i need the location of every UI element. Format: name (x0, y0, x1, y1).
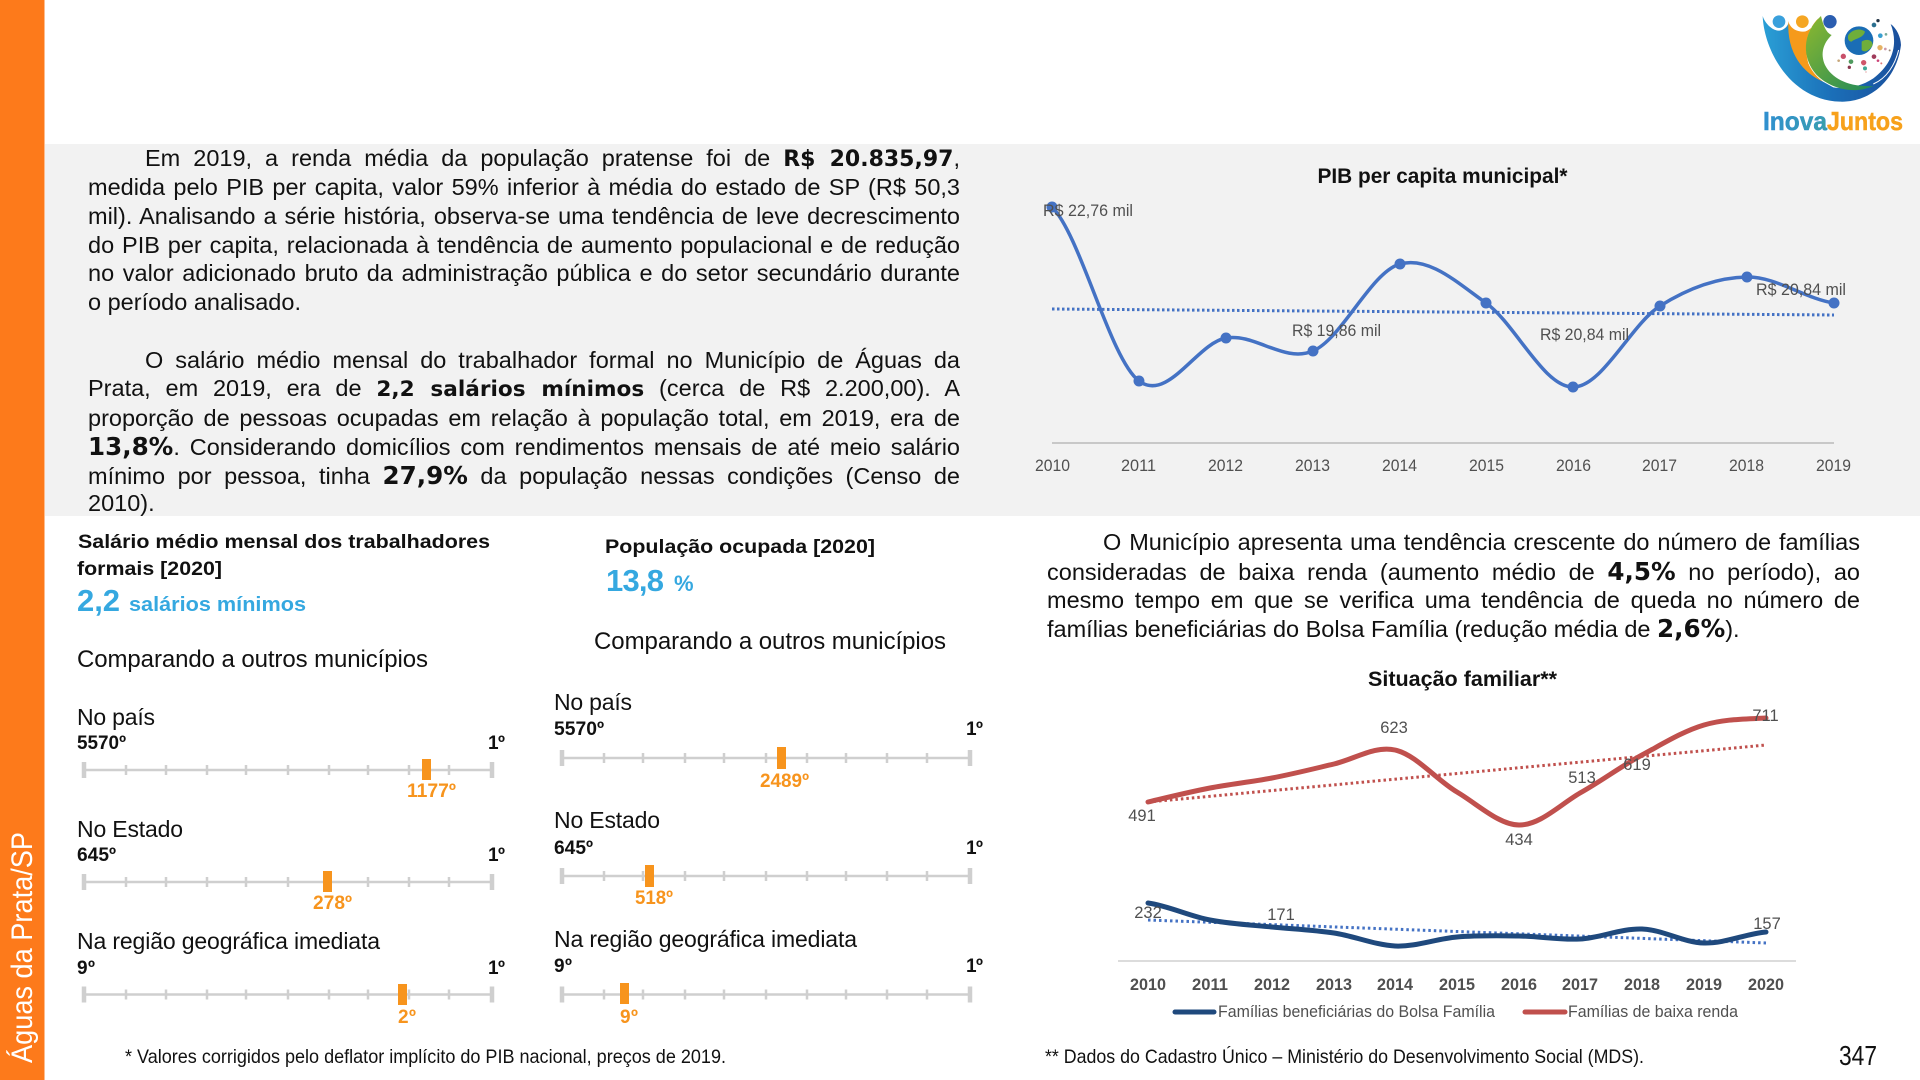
text block: famílias (1047, 529, 1860, 643)
text: mil). Analisando a série história, observa-se uma tendência de leve decrescimento (88, 203, 960, 229)
chart title: Situação familiar** (1368, 668, 1558, 691)
x axis years: 2019 (1686, 976, 1722, 994)
rank: região imediata: Na região geográfica imediata (77, 928, 380, 954)
page number: 347 (1839, 1040, 1877, 1071)
rank: região imediata: 1º (966, 956, 983, 977)
data labels: 232 (1134, 904, 1162, 922)
rank: no estado: No Estado (77, 816, 183, 842)
data labels: 513 (1568, 769, 1596, 787)
text: mesmo tempo em que se verifica uma tendência de queda no número de (1047, 587, 1860, 613)
heading: População ocupada [2020] (605, 536, 875, 558)
x axis years: 2010 (1035, 457, 1070, 475)
rank: no país (77, 704, 505, 802)
text: famílias beneficiárias do Bolsa Família (redução média de 2,6%). (1047, 614, 1740, 643)
rank: no país: No país (554, 689, 632, 715)
x axis years (1130, 976, 1784, 994)
big value (606, 563, 694, 598)
x axis years: 2018 (1729, 457, 1764, 475)
chart: situação familiar (1118, 668, 1796, 1021)
x axis years: 2018 (1624, 976, 1660, 994)
text: proporção de pessoas ocupadas em relação à população total, em 2019, era de (88, 405, 960, 431)
logo: Inova Juntos (1763, 15, 1903, 136)
rank: no estado: 278º (313, 893, 352, 914)
rank: no país: 1º (966, 719, 983, 740)
data labels: 623 (1380, 719, 1408, 737)
big value: 2,2 (77, 583, 120, 618)
x axis years: 2016 (1556, 457, 1591, 475)
data labels: 434 (1505, 831, 1533, 849)
rank: no estado: 518º (635, 888, 673, 909)
heading (77, 531, 490, 580)
data labels: R$ 19,86 mil (1292, 322, 1381, 340)
x axis years: 2013 (1316, 976, 1352, 994)
comparison heading: Comparando a outros municípios (77, 646, 428, 673)
x axis years: 2014 (1377, 976, 1414, 994)
rank: região imediata: 9º (77, 958, 95, 979)
data labels: R$ 22,76 mil (1043, 202, 1133, 220)
panel: salário médio mensal (77, 531, 505, 1028)
legend: Famílias beneficiárias do Bolsa Família (1218, 1003, 1496, 1021)
panel: gray background (45, 144, 1920, 516)
sidebar: municipality (0, 0, 44, 1080)
x axis years: 2019 (1816, 457, 1851, 475)
line: bolsa família (1148, 903, 1766, 946)
x axis years: 2011 (1121, 457, 1156, 475)
rank: no estado: 1º (488, 845, 505, 866)
data labels (1043, 202, 1846, 344)
text: do PIB per capita, relacionada à tendência de aumento populacional e de redução (88, 232, 960, 258)
data labels: 491 (1128, 807, 1156, 825)
comparison heading: Comparando a outros municípios (594, 628, 946, 655)
rank: região imediata: Na região geográfica imediata (554, 926, 857, 952)
rank: no estado: 645º (77, 845, 116, 866)
rank: no país: No país (77, 704, 155, 730)
rank: no país: 2489º (760, 771, 809, 792)
x axis years: 2013 (1295, 457, 1330, 475)
heading: Salário médio mensal dos trabalhadores (78, 531, 490, 553)
data labels (1128, 707, 1781, 933)
rank: região imediata (77, 928, 505, 1028)
chart title: PIB per capita municipal* (1318, 165, 1568, 188)
x axis years: 2011 (1192, 976, 1228, 994)
rank: no país: 1º (488, 733, 505, 754)
rank: região imediata (554, 926, 983, 1028)
big value: 13,8 (606, 563, 664, 598)
rank: no estado (554, 807, 983, 909)
footnote: PIB: * Valores corrigidos pelo deflator implícito do PIB nacional, preços de 2019. (125, 1046, 726, 1068)
data labels: R$ 20,84 mil (1540, 326, 1629, 344)
data labels: 171 (1267, 906, 1295, 924)
logo: Inova Juntos: Inova (1763, 106, 1827, 136)
rank: região imediata: 2º (398, 1007, 416, 1028)
text: 13,8%. Considerando domicílios com rendimentos mensais de até meio salário (88, 432, 960, 461)
heading: formais [2020] (77, 558, 222, 580)
rank: região imediata: 9º (554, 956, 572, 977)
x axis years: 2017 (1642, 457, 1677, 475)
text: medida pelo PIB per capita, valor 59% inferior à média do estado de SP (R$ 50,3 (88, 174, 960, 200)
line series (1052, 207, 1834, 387)
text block: salário médio (88, 347, 960, 516)
x axis years: 2010 (1130, 976, 1166, 994)
data labels: 157 (1753, 915, 1781, 933)
rank: no estado: 645º (554, 838, 593, 859)
x axis years: 2017 (1562, 976, 1598, 994)
text: O Município apresenta uma tendência crescente do número de famílias (1103, 529, 1860, 555)
text: no valor adicionado bruto da administração pública e do setor secundário durante (88, 260, 960, 286)
text: Prata, em 2019, era de 2,2 salários mínimos (cerca de R$ 2.200,00). A (88, 375, 960, 402)
data labels: 711 (1752, 707, 1779, 725)
x axis years: 2014 (1382, 457, 1417, 475)
x axis years: 2012 (1208, 457, 1243, 475)
rank: região imediata: 9º (620, 1007, 638, 1028)
big value: salários mínimos (129, 594, 306, 616)
rank: no país: 5570º (77, 733, 126, 754)
x axis years: 2015 (1439, 976, 1475, 994)
legend: Famílias de baixa renda (1568, 1003, 1739, 1021)
legend (1175, 1003, 1739, 1021)
rank: região imediata: 1º (488, 958, 505, 979)
sidebar label: Águas da Prata/SP (6, 832, 39, 1063)
x axis years: 2012 (1254, 976, 1290, 994)
rank: no país (554, 689, 983, 792)
rank: no estado: No Estado (554, 807, 660, 833)
chart: PIB per capita municipal (1035, 165, 1851, 475)
footnote: Cadastro Único: ** Dados do Cadastro Único – Ministério do Desenvolvimento Social (MDS). (1045, 1045, 1644, 1068)
text: o período analisado. (88, 289, 301, 315)
text block: renda média (88, 145, 960, 315)
rank: no estado (77, 816, 505, 914)
x axis years: 2020 (1748, 976, 1784, 994)
data labels: 619 (1623, 756, 1651, 774)
text: 2010). (88, 490, 155, 516)
text: O salário médio mensal do trabalhador formal no Município de Águas da (145, 347, 960, 373)
big value: % (674, 571, 694, 596)
big value (77, 583, 306, 618)
x axis years: 2015 (1469, 457, 1504, 475)
logo: Inova Juntos: Juntos (1827, 106, 1903, 136)
x axis years: 2016 (1501, 976, 1537, 994)
text: consideradas de baixa renda (aumento médio de 4,5% no período), ao (1047, 557, 1860, 586)
rank: no país: 1177º (407, 781, 456, 802)
x axis years (1035, 457, 1851, 475)
panel: população ocupada (554, 536, 983, 1028)
data labels: R$ 20,84 mil (1756, 281, 1846, 299)
rank: no estado: 1º (966, 838, 983, 859)
text: mínimo por pessoa, tinha 27,9% da população nessas condições (Censo de (88, 461, 960, 490)
text: Em 2019, a renda média da população pratense foi de R$ 20.835,97, (145, 145, 960, 172)
rank: no país: 5570º (554, 719, 604, 740)
line: famílias de baixa renda (1148, 718, 1766, 825)
data markers (1046, 202, 1840, 392)
